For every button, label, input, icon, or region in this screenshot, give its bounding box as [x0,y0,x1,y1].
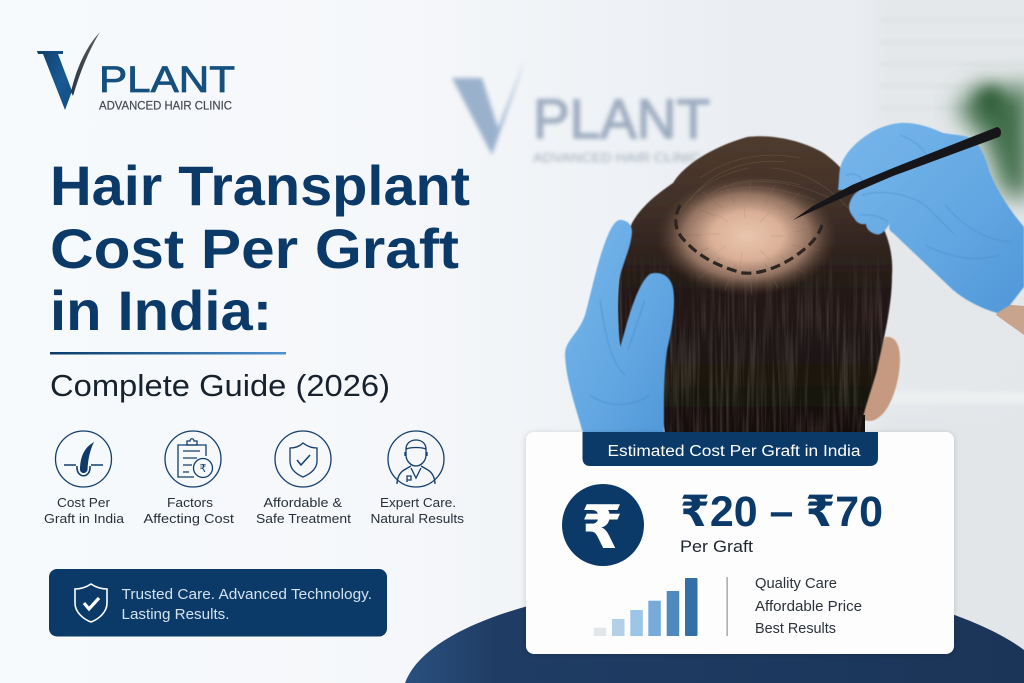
subtitle: Complete Guide (2026) [50,368,390,403]
bald scalp [657,176,837,296]
label: Factors [167,495,214,510]
banner text [122,586,372,623]
label [44,495,125,526]
feature icons row [44,431,465,526]
label [256,495,351,526]
label: Cost Per [57,495,111,510]
left gloved hand [565,220,674,433]
banner text: Lasting Results. [122,606,230,623]
icon: clipboard with rupee: ₹ [200,463,206,475]
banner text: Trusted Care. Advanced Technology. [122,586,372,603]
feature: cost per graft [44,431,125,526]
cost card [526,432,954,654]
label: Graft in India [44,511,125,526]
logo tagline: ADVANCED HAIR CLINIC [99,100,232,112]
blurred wall logo: ADVANCED HAIR CLINIC [533,150,701,165]
shirt [405,598,1024,683]
feature: expert care [370,431,465,526]
per graft: Per Graft [680,537,753,556]
forearm [996,304,1024,335]
benefits list: Affordable Price [755,599,862,615]
feature: affordable and safe [256,431,351,526]
feature: factors affecting cost [144,431,234,526]
photo: head with marked hairline [565,123,1024,435]
label: Affordable & [264,495,342,510]
title [50,154,470,342]
blurred wall logo: PLANT [533,87,710,150]
label [370,495,465,526]
right gloved hand [838,123,1024,313]
blurred wall logo [452,60,710,165]
icon: shield check [275,431,331,487]
label: Expert Care. [380,495,456,510]
icon: hair follicle [56,431,112,487]
rupee badge [562,484,644,566]
benefits list [755,576,862,637]
icon: doctor [388,431,444,487]
dashed outline on scalp [676,205,822,273]
hair strands [675,155,848,295]
rupee badge: ₹ [581,494,623,561]
hair [618,136,892,433]
logo wordmark: PLANT [99,59,235,100]
label: Affecting Cost [144,511,234,526]
label: Safe Treatment [256,511,351,526]
label: Natural Results [370,511,465,526]
card heading pill: Estimated Cost Per Graft in India [608,443,861,460]
title: Cost Per Graft [50,217,459,280]
title: Hair Transplant [50,154,470,217]
bar chart [594,578,698,636]
logo [37,32,235,112]
icon: shield with check [75,584,107,622]
title: in India: [50,279,272,342]
card heading pill [582,432,878,466]
pen [793,127,1001,220]
logo mark: V with hair swoosh [37,32,100,110]
trust banner [49,569,387,636]
ear [858,337,900,421]
benefits list: Best Results [755,621,836,637]
neck [665,415,865,433]
label [144,495,234,526]
price range: ₹20 – ₹70 [680,488,883,536]
benefits list: Quality Care [755,576,837,592]
hair streak texture [619,265,888,432]
